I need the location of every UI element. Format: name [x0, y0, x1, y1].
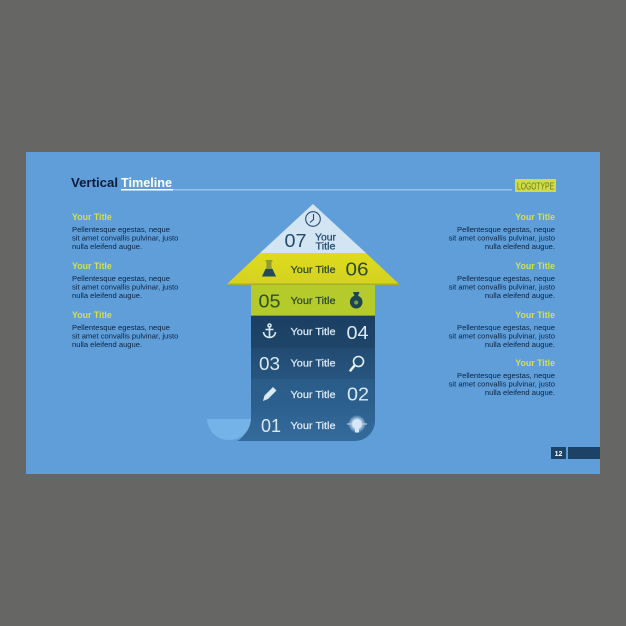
- right block 3: Pellentesque egestas, neque: [457, 323, 555, 332]
- right block 4: Pellentesque egestas, neque: [457, 371, 555, 380]
- left block 3: [72, 310, 178, 349]
- step 03: Your Title: [290, 358, 336, 370]
- right block 3: nulla eleifend augue.: [485, 340, 555, 349]
- right block 4: Your Title: [515, 358, 555, 368]
- left block 3: sit amet convallis pulvinar, justo: [72, 332, 178, 340]
- icon: clock: [306, 212, 320, 226]
- step 03: [251, 348, 375, 379]
- icon: light bulb: [347, 415, 367, 433]
- step 03: 03: [259, 353, 280, 374]
- right block 1: Your Title: [515, 212, 555, 222]
- logotype: LOGOTYPE: [517, 180, 554, 192]
- left block 2: nulla eleifend augue.: [72, 291, 142, 300]
- footer bar: [568, 447, 600, 459]
- right block 2: Pellentesque egestas, neque: [457, 274, 555, 283]
- step 07: Title: [316, 242, 336, 252]
- step 01 with curl: [207, 410, 375, 441]
- title: Timeline: [121, 176, 172, 190]
- curl: [207, 419, 251, 440]
- step 04: 04: [346, 322, 368, 343]
- step 05: 05: [258, 290, 280, 312]
- slide panel: [26, 152, 600, 474]
- step 06: Your Title: [290, 265, 336, 276]
- left text blocks: [72, 212, 178, 349]
- icon: anchor: [264, 324, 276, 338]
- right block 2: [449, 261, 555, 300]
- icon: magnifier: [350, 356, 364, 370]
- left block 2: [72, 261, 178, 300]
- left block 3: nulla eleifend augue.: [72, 340, 142, 349]
- left block 2: sit amet convallis pulvinar, justo: [72, 282, 178, 292]
- left block 1: Your Title: [72, 212, 112, 222]
- step 02: Your Title: [290, 390, 336, 401]
- right block 3: Your Title: [515, 310, 555, 320]
- page number: [551, 447, 566, 459]
- icon: flask: [262, 260, 276, 276]
- icon: pencil: [263, 387, 276, 401]
- right block 4: nulla eleifend augue.: [485, 388, 555, 397]
- left block 1: Pellentesque egestas, neque: [72, 225, 170, 234]
- right block 2: nulla eleifend augue.: [485, 291, 555, 300]
- left block 1: [72, 212, 178, 251]
- left block 1: sit amet convallis pulvinar, justo: [72, 234, 178, 242]
- left block 1: nulla eleifend augue.: [72, 242, 142, 251]
- step 01 with curl: Your Title: [290, 421, 336, 432]
- arrow timeline: [207, 204, 399, 441]
- step 05: Your Title: [290, 296, 336, 307]
- step 02: 02: [347, 384, 369, 404]
- step 07: [260, 204, 366, 253]
- left block 3: Pellentesque egestas, neque: [72, 323, 170, 332]
- header rule: [173, 189, 512, 190]
- right block 1: Pellentesque egestas, neque: [457, 225, 555, 234]
- left block 3: Your Title: [72, 310, 112, 320]
- icon: money bag: [350, 292, 363, 308]
- right block 3: sit amet convallis pulvinar, justo: [449, 332, 555, 340]
- right block 4: sit amet convallis pulvinar, justo: [449, 380, 555, 388]
- right block 4: [449, 358, 555, 397]
- left block 2: Your Title: [72, 261, 112, 271]
- step 01 with curl: 01: [261, 415, 281, 436]
- step 05: [251, 285, 375, 316]
- title: Vertical: [71, 176, 118, 190]
- right block 1: nulla eleifend augue.: [485, 242, 555, 251]
- logotype: [515, 179, 556, 192]
- step 07: 07: [284, 230, 306, 251]
- right block 1: sit amet convallis pulvinar, justo: [449, 234, 555, 242]
- step 06: 06: [346, 258, 368, 280]
- right text blocks: [449, 212, 555, 397]
- step 02: [251, 379, 375, 410]
- step 04: Your Title: [290, 327, 336, 338]
- step 04: [251, 316, 375, 348]
- right block 3: [449, 310, 555, 349]
- right block 2: Your Title: [515, 261, 555, 271]
- right block 2: sit amet convallis pulvinar, justo: [449, 282, 555, 292]
- page number: 12: [555, 451, 562, 458]
- step 07: Your: [315, 232, 337, 244]
- right block 1: [449, 212, 555, 251]
- title: [71, 176, 173, 190]
- step 06: [227, 253, 399, 285]
- left block 2: Pellentesque egestas, neque: [72, 274, 170, 283]
